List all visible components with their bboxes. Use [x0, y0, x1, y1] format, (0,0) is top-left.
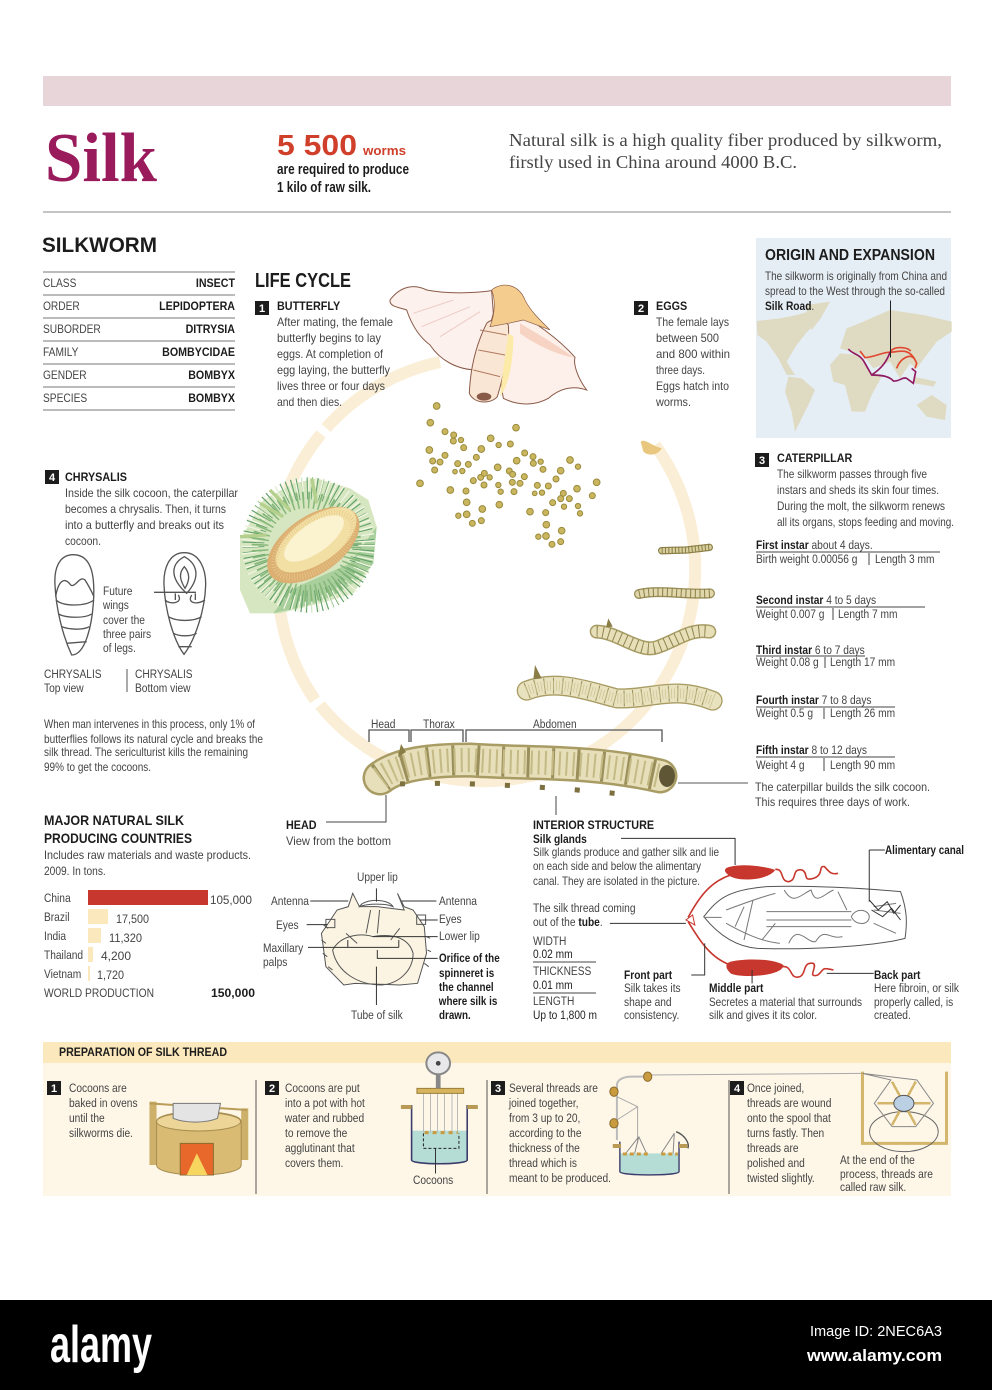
step 3: according to the [509, 1127, 582, 1140]
step 1 [47, 1081, 138, 1140]
panel: origin and expansion: ORIGIN AND EXPANSION [765, 247, 935, 264]
illustration: spool wheel [862, 1072, 946, 1152]
illustration: head from below [307, 888, 438, 1005]
intro text [509, 130, 942, 172]
step 1: baked in ovens [69, 1097, 138, 1110]
chrysalis note: three pairs [103, 628, 152, 641]
instar data: Fourth instar 7 to 8 days [756, 694, 872, 707]
key statistic: worms per kilo: are required to produce [277, 161, 409, 178]
key statistic: worms per kilo: worms [362, 143, 406, 158]
taxonomy table: FAMILY [43, 346, 79, 359]
text: human intervention: silk thread. The sericulturist kills the remaining [44, 745, 248, 759]
section: interior structure text [533, 820, 719, 929]
panel: origin and expansion: Silk Road. [765, 300, 814, 313]
silk thread measurements [533, 935, 597, 1022]
instar data: Length 3 mm [875, 553, 934, 566]
step 3: caterpillar text: During the molt, the silkworm renews [777, 499, 945, 513]
interior labels: Silk takes its [624, 982, 681, 995]
interior labels: created. [874, 1009, 911, 1022]
chart: major natural silk producing countries: PRODUCING COUNTRIES [44, 830, 192, 846]
chrysalis note: wings [102, 599, 129, 612]
interior labels: Front part [624, 969, 672, 982]
illustration: eggs [417, 403, 600, 547]
chart: major natural silk producing countries: 4,200 [101, 949, 131, 963]
chart: major natural silk producing countries: MAJOR NATURAL SILK [44, 812, 184, 828]
panel: origin and expansion [756, 238, 952, 438]
final note [840, 1154, 933, 1194]
interior labels: Secretes a material that surrounds [709, 995, 862, 1009]
section: interior structure text: canal. They are isolated in the picture. [533, 874, 700, 888]
head labels: where silk is [438, 995, 497, 1008]
step 4: onto the spool that [747, 1112, 832, 1125]
interior labels: silk and gives it its color. [709, 1008, 817, 1022]
step 4 [730, 1081, 832, 1185]
text: human intervention: When man intervenes in this process, only 1% of [44, 717, 256, 731]
step 2 [265, 1081, 366, 1170]
step 3 [491, 1081, 611, 1185]
instar data: Birth weight 0.00056 g [756, 553, 857, 566]
step 2: to remove the [285, 1127, 347, 1140]
step 2: eggs text [634, 301, 730, 409]
section: interior structure text: INTERIOR STRUCTURE [533, 820, 654, 832]
step 4: turns fastly. Then [747, 1127, 824, 1140]
taxonomy table: ORDER [43, 300, 80, 313]
section: interior structure text: out of the tube. [533, 916, 603, 929]
step 2: eggs text: and 800 within [656, 347, 730, 361]
step 1: butterfly text: butterfly begins to lay [277, 331, 381, 345]
heading: life cycle: LIFE CYCLE [255, 270, 351, 292]
illustration: reeling threads and basin [610, 1072, 862, 1175]
world map with silk road [757, 301, 952, 432]
step 3: 3 [495, 1083, 501, 1095]
instar data: Second instar 4 to 5 days [756, 594, 876, 607]
instar data: Length 26 mm [830, 707, 895, 720]
step 4: 4 [734, 1083, 741, 1095]
cocoon note with leader: The caterpillar builds the silk cocoon. [755, 780, 930, 794]
key statistic: worms per kilo: 1 kilo of raw silk. [277, 179, 371, 196]
chart: major natural silk producing countries: 105,000 [210, 893, 252, 907]
chart: major natural silk producing countries: Includes raw materials and waste products. [44, 848, 251, 862]
head labels: Eyes [276, 919, 299, 932]
instar data [756, 539, 940, 772]
heading: head [286, 795, 391, 848]
instar data: Weight 0.08 g [756, 656, 819, 669]
footer: stock photo bar [0, 1300, 992, 1390]
step 1: butterfly text: BUTTERFLY [277, 301, 341, 313]
instar data: Weight 0.5 g [756, 707, 813, 720]
step 1: silkworms die. [69, 1127, 133, 1140]
step 4: chrysalis text [45, 470, 238, 548]
heading: head: HEAD [286, 820, 317, 832]
instar data: Weight 4 g [756, 759, 805, 772]
taxonomy table: INSECT [196, 277, 235, 290]
chrysalis captions [44, 668, 193, 695]
icon: pot with pressure gauge [401, 1052, 478, 1173]
silk thread measurements: LENGTH [533, 995, 574, 1008]
illustration: fifth instar caterpillar with body-part brackets: Thorax [423, 718, 455, 731]
chrysalis captions: Bottom view [135, 682, 191, 695]
footer: stock photo bar: Image ID: 2NEC6A3 [810, 1323, 942, 1340]
chart: major natural silk producing countries: 17,500 [116, 912, 149, 926]
step 2: eggs text: three days. [656, 363, 705, 377]
intro text: Natural silk is a high quality fiber produced by silkworm, [509, 130, 942, 150]
step 3: thread which is [509, 1157, 577, 1170]
step 2: eggs text: between 500 [656, 331, 719, 345]
step 2: eggs text: EGGS [656, 301, 688, 313]
head labels: the channel [439, 981, 494, 994]
final note: At the end of the [840, 1154, 915, 1167]
step 2: eggs text: The female lays [656, 315, 729, 329]
step 4: chrysalis text: 4 [49, 472, 56, 484]
step 2: eggs text: worms. [655, 395, 691, 409]
section: interior structure text: The silk thread coming [533, 902, 636, 915]
step 2: water and rubbed [284, 1112, 364, 1125]
step 2: agglutinant that [285, 1142, 356, 1155]
step 1: butterfly text: lives three or four days [277, 379, 385, 393]
step 2: eggs text: Eggs hatch into [656, 379, 729, 393]
panel: origin and expansion: The silkworm is originally from China and [765, 269, 947, 283]
step 3: Several threads are [509, 1082, 598, 1095]
step 2: eggs text: 2 [638, 303, 644, 315]
chart: major natural silk producing countries: 11,320 [109, 931, 142, 945]
top pink band [43, 76, 951, 106]
illustration: growing caterpillars [527, 547, 713, 701]
instar data: Length 17 mm [830, 656, 895, 669]
taxonomy table: BOMBYX [188, 392, 235, 405]
chrysalis captions: CHRYSALIS [135, 668, 193, 681]
step 3: caterpillar text [755, 453, 954, 529]
head labels: Lower lip [439, 930, 480, 943]
final note: called raw silk. [840, 1181, 906, 1194]
interior labels: consistency. [624, 1009, 679, 1022]
step 1: butterfly text [255, 301, 393, 409]
step 1: 1 [51, 1083, 57, 1095]
second instar [639, 592, 710, 594]
taxonomy table: SPECIES [43, 392, 87, 405]
interior labels: shape and [624, 996, 672, 1009]
silk thread measurements: Up to 1,800 m [533, 1009, 597, 1022]
chart: major natural silk producing countries: Thailand [44, 949, 83, 962]
life cycle ring [280, 362, 695, 781]
taxonomy table: GENDER [43, 369, 87, 382]
taxonomy table: SUBORDER [43, 323, 101, 336]
head labels: Orifice of the [439, 952, 500, 965]
illustration: fifth instar caterpillar with body-part brackets: Abdomen [533, 718, 577, 731]
chrysalis bottom view [154, 553, 206, 654]
head labels: Maxillary [263, 942, 304, 955]
silk thread measurements: 0.02 mm [533, 948, 573, 961]
instar data: Weight 0.007 g [756, 608, 824, 621]
head labels: Antenna [271, 895, 310, 908]
head labels: palps [263, 956, 288, 969]
heading: silkworm: SILKWORM [42, 234, 157, 257]
heading: PREPARATION OF SILK THREAD [59, 1045, 227, 1059]
title: Silk [45, 120, 157, 197]
illustration: silk glands and interior [610, 838, 906, 983]
section: interior structure text: on each side and below the alimentary [533, 859, 701, 873]
step 1: until the [69, 1112, 105, 1125]
taxonomy table: BOMBYX [188, 369, 235, 382]
illustration: fifth instar caterpillar with body-part brackets: Head [371, 718, 395, 731]
taxonomy table: BOMBYCIDAE [162, 346, 235, 359]
step 4: threads are wound [747, 1097, 831, 1110]
step 4: threads are [747, 1142, 799, 1155]
illustration: moth [390, 285, 587, 404]
step 4: Once joined, [747, 1082, 804, 1095]
silk thread measurements: WIDTH [533, 935, 566, 948]
icon: oven [149, 1102, 248, 1175]
instar data: Length 90 mm [830, 759, 895, 772]
cocoon note with leader: This requires three days of work. [755, 795, 910, 809]
intro text: firstly used in China around 4000 B.C. [509, 152, 797, 172]
interior labels: Middle part [709, 982, 764, 995]
step 4: chrysalis text: cocoon. [65, 534, 101, 548]
chrysalis captions: CHRYSALIS [44, 668, 102, 681]
text: human intervention: butterflies follows its natural cycle and breaks the [44, 732, 263, 746]
chart: major natural silk producing countries: India [44, 930, 67, 943]
silk thread measurements: 0.01 mm [533, 979, 573, 992]
step 1: butterfly text: eggs. At completion of [277, 347, 384, 361]
head labels: drawn. [439, 1009, 471, 1022]
taxonomy table: CLASS [43, 277, 76, 290]
first instar [662, 547, 709, 551]
chart: major natural silk producing countries: China [44, 892, 71, 905]
step 2: 2 [269, 1083, 275, 1095]
silk thread measurements: THICKNESS [533, 965, 591, 978]
instar data: Fifth instar 8 to 12 days [756, 744, 867, 757]
chart: major natural silk producing countries [44, 812, 255, 1000]
step 1: butterfly text: 1 [259, 303, 265, 315]
footer: stock photo bar: alamy [50, 1316, 152, 1374]
illustration: fifth instar caterpillar with body-part brackets [369, 718, 675, 796]
section: interior structure text: Silk glands [533, 833, 587, 846]
instar data: First instar about 4 days. [756, 539, 873, 552]
chart: major natural silk producing countries: Vietnam [44, 968, 81, 981]
step 4: chrysalis text: Inside the silk cocoon, the caterpillar [65, 486, 238, 500]
step 1: butterfly text: and then dies. [277, 395, 342, 409]
chart: major natural silk producing countries: 1,720 [97, 968, 124, 982]
head labels: Antenna [439, 895, 478, 908]
step 1: butterfly text: egg laying, the butterfly [277, 363, 390, 377]
step 4: chrysalis text: CHRYSALIS [65, 472, 127, 484]
head labels: Upper lip [357, 871, 398, 884]
step 2: covers them. [285, 1157, 343, 1170]
step 3: thickness of the [509, 1142, 580, 1155]
heading: head: View from the bottom [286, 834, 391, 848]
chrysalis note: of legs. [103, 642, 136, 655]
text: human intervention [44, 717, 263, 774]
head labels: Tube of silk [351, 1009, 403, 1022]
third instar [597, 618, 709, 648]
footer: stock photo bar: www.alamy.com [806, 1346, 942, 1365]
step 4: polished and [747, 1157, 805, 1170]
step 3: caterpillar text: The silkworm passes through five [777, 467, 927, 481]
illustration: chrysalis views [55, 553, 206, 655]
step 2: Cocoons are put [285, 1082, 361, 1095]
taxonomy table: DITRYSIA [186, 323, 235, 336]
taxonomy table: LEPIDOPTERA [159, 300, 235, 313]
text: human intervention: 99% to get the cocoons. [44, 760, 151, 774]
step 1: butterfly text: After mating, the female [277, 315, 393, 329]
head labels [263, 871, 500, 1022]
step 4: chrysalis text: becomes a chrysalis. Then, it turns [65, 502, 226, 516]
step 3: caterpillar text: 3 [759, 455, 765, 467]
final note: process, threads are [840, 1168, 933, 1181]
chart: major natural silk producing countries: WORLD PRODUCTION [44, 986, 154, 1000]
key statistic: worms per kilo [277, 130, 409, 196]
interior labels: Back part [874, 969, 921, 982]
chart: major natural silk producing countries: Brazil [44, 911, 69, 924]
step 3: meant to be produced. [509, 1172, 611, 1185]
interior labels [624, 843, 964, 1022]
step 3: caterpillar text: all its organs, stops feeding and moving. [777, 515, 954, 529]
step 3: from 3 up to 20, [509, 1112, 580, 1125]
step 3: caterpillar text: instars and sheds its skin four times. [777, 483, 939, 497]
head labels: spinneret is [439, 967, 494, 980]
chrysalis note [102, 585, 152, 655]
cocoon note with leader [678, 780, 930, 809]
panel: origin and expansion: spread to the West through the so-called [765, 284, 945, 298]
taxonomy table [43, 272, 235, 410]
interior labels: properly called, is [874, 996, 954, 1009]
step 1: Cocoons are [69, 1082, 127, 1095]
head labels: Eyes [439, 913, 462, 926]
chrysalis note: Future [103, 585, 132, 598]
chrysalis top view [55, 555, 94, 655]
chart: major natural silk producing countries: 2009. In tons. [44, 865, 106, 878]
chart: major natural silk producing countries: 150,000 [211, 986, 255, 1000]
key statistic: worms per kilo: 5 500 [277, 130, 357, 162]
chrysalis captions: Top view [44, 682, 85, 695]
leader from caterpillar to interior structure [555, 796, 557, 815]
instar data: Third instar 6 to 7 days [756, 644, 865, 657]
illustration: cocoon on leaves [240, 478, 377, 613]
step 3: caterpillar text: CATERPILLAR [777, 453, 852, 465]
step 4: chrysalis text: into a butterfly and breaks out its [65, 518, 224, 532]
interior labels: Alimentary canal [885, 843, 964, 857]
step 2: into a pot with hot [285, 1097, 366, 1110]
label: cocoons: Cocoons [413, 1174, 454, 1187]
step 3: joined together, [508, 1097, 579, 1110]
fourth instar [527, 665, 713, 701]
instar data: Length 7 mm [838, 608, 897, 621]
chrysalis note: cover the [103, 614, 145, 627]
section: interior structure text: Silk glands produce and gather silk and lie [533, 845, 719, 859]
panel: preparation of silk thread [0, 1042, 992, 1390]
interior labels: Here fibroin, or silk [874, 982, 959, 995]
illustration: hatchling [641, 441, 662, 455]
step 4: twisted slightly. [747, 1172, 815, 1185]
